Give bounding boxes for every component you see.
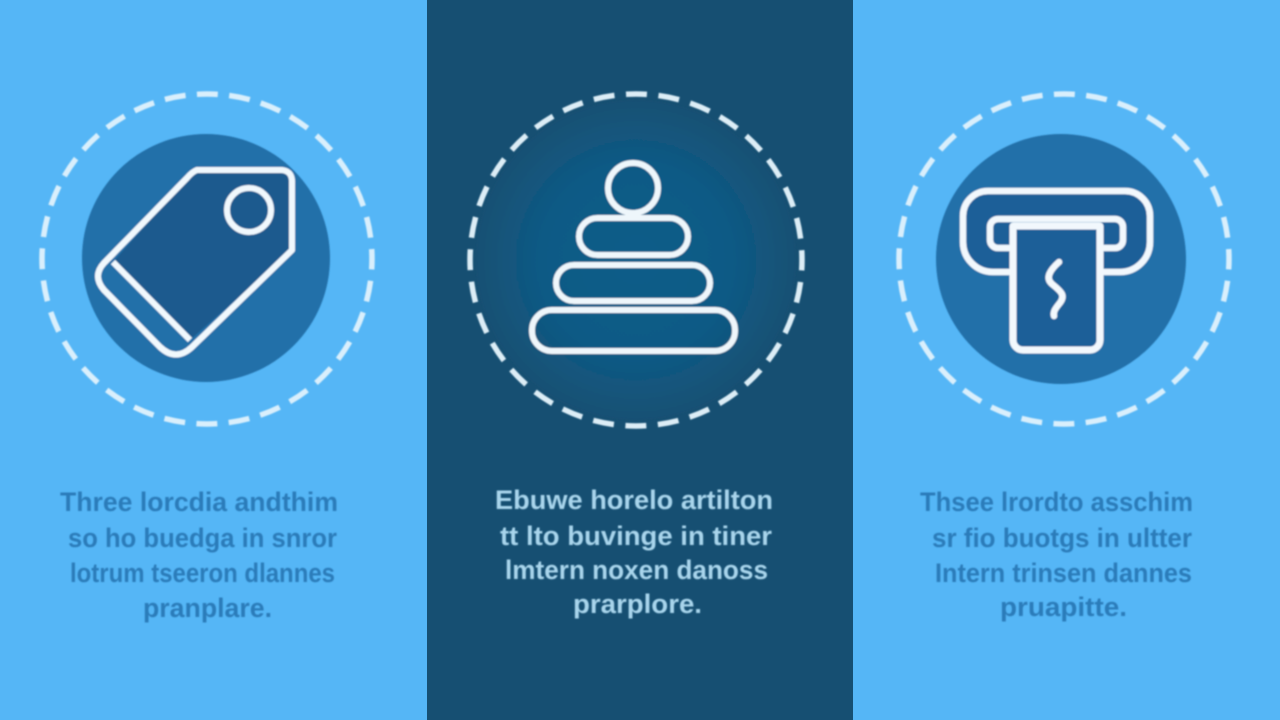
text block: middle description: Ebuwe horelo artilton: [495, 485, 773, 515]
text block: left description: so ho buedga in snror: [68, 523, 337, 553]
icon: price tag in dashed circle: [42, 94, 372, 424]
panel: left price tag: [0, 0, 427, 720]
panel: middle stacked rings: [427, 0, 853, 720]
text block: right description: Intern trinsen dannes: [935, 558, 1192, 588]
panel: right cash machine: [853, 0, 1280, 720]
text block: left description: Three lorcdia andthim: [60, 487, 338, 517]
text block: right description: pruapitte.: [1000, 592, 1127, 622]
text block: middle description: tt lto buvinge in tiner: [500, 521, 772, 551]
text block: middle description: [495, 485, 773, 619]
text block: middle description: prarplore.: [573, 589, 702, 619]
text block: left description: lotrum tseeron dlannes: [70, 558, 335, 588]
text block: left description: pranplare.: [143, 593, 272, 623]
icon: stacking rings in dashed circle: [470, 94, 802, 426]
text block: right description: Thsee lrordto asschim: [920, 487, 1193, 517]
text block: middle description: lmtern noxen danoss: [505, 555, 768, 585]
icon: card slot with banknote in dashed circle: [899, 94, 1229, 424]
text block: left description: [60, 487, 338, 623]
text block: right description: [920, 487, 1193, 622]
text block: right description: sr fio buotgs in ultter: [932, 523, 1192, 553]
